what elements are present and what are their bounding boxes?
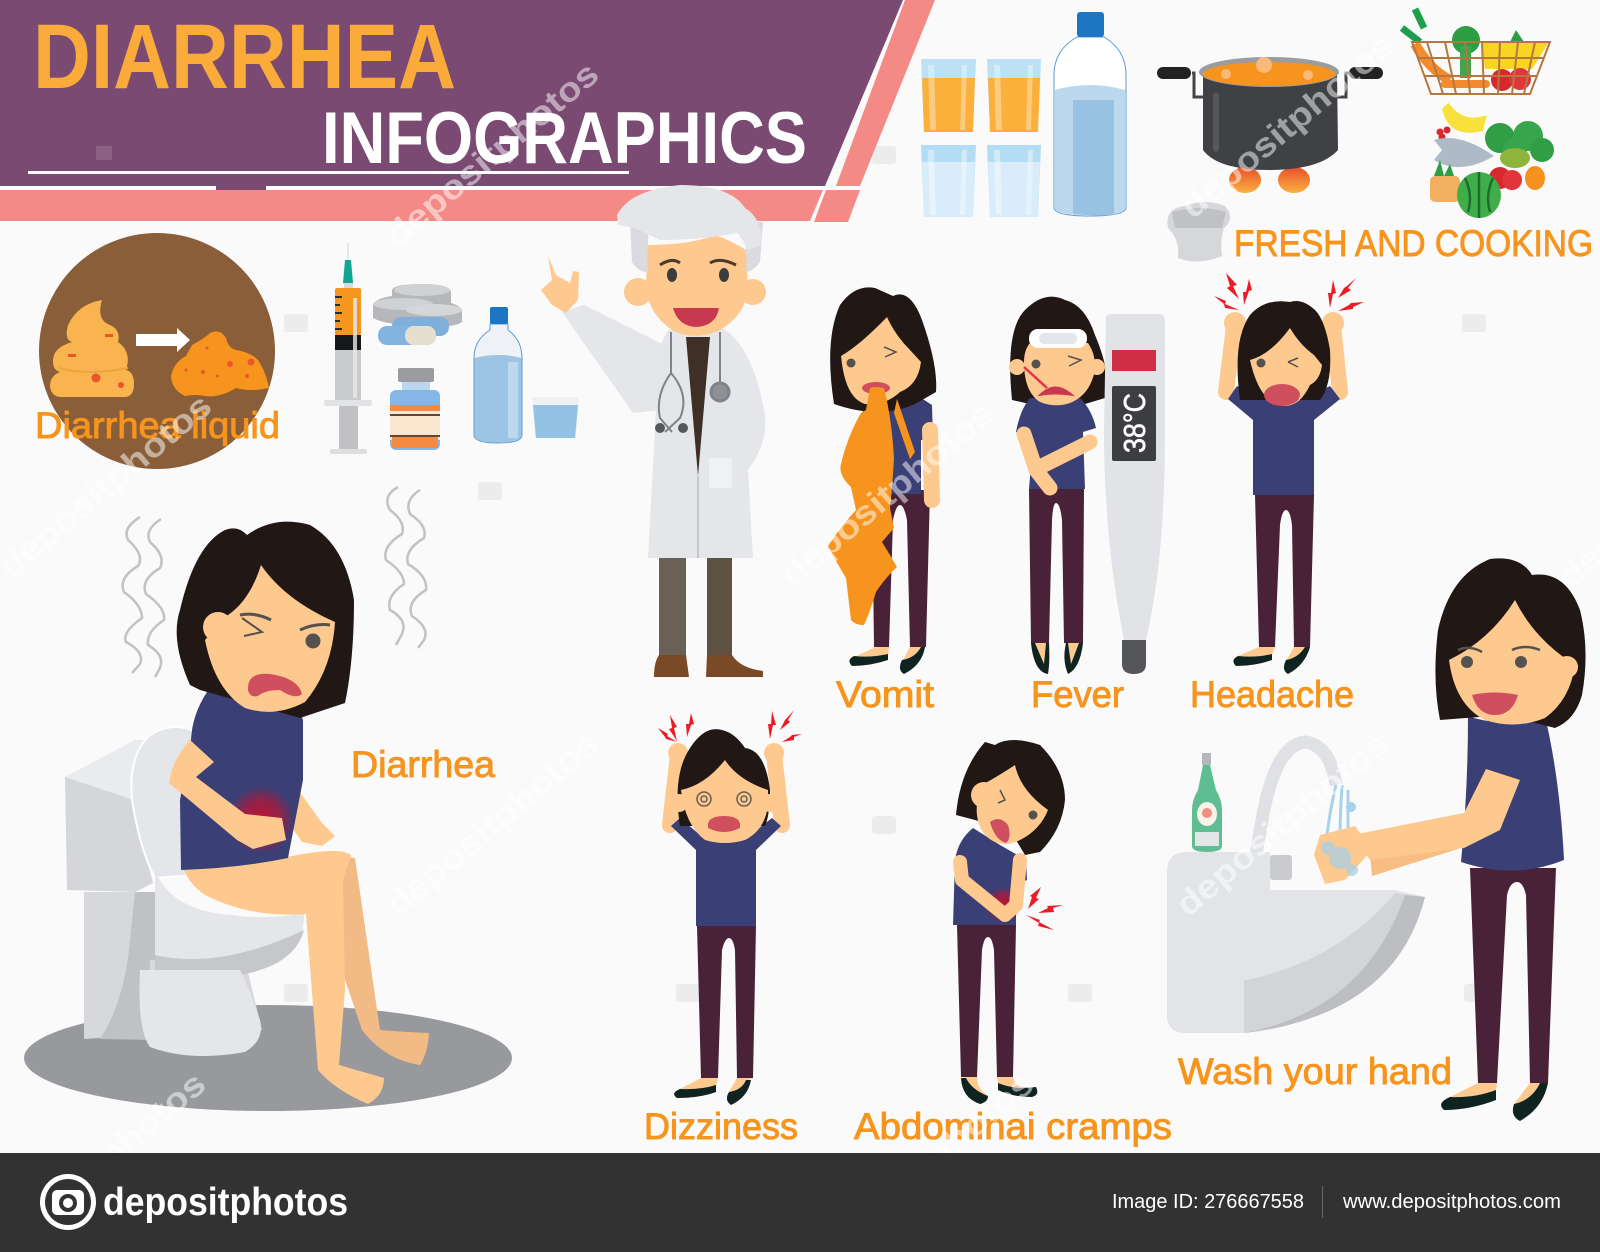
face — [971, 782, 997, 808]
icon: cooking pot — [1157, 57, 1383, 193]
back leg — [325, 856, 429, 1065]
pants — [659, 555, 686, 660]
feet — [1238, 647, 1310, 661]
arms — [670, 755, 782, 825]
legs — [697, 926, 756, 1078]
shirt — [1016, 398, 1096, 489]
header banner — [0, 0, 935, 222]
shoes — [849, 654, 888, 666]
arm — [1024, 434, 1090, 488]
shoes — [654, 655, 689, 677]
shirt — [953, 828, 1027, 925]
label: dizziness: Dizziness — [644, 1106, 798, 1147]
far hand — [290, 784, 335, 846]
hands — [1314, 826, 1372, 884]
lightning — [1214, 273, 1364, 311]
hair — [956, 740, 1065, 855]
icon: fresh food — [1430, 108, 1554, 218]
icon: vial — [390, 368, 440, 450]
label: fever: Fever — [1031, 674, 1124, 715]
shirt — [862, 389, 933, 494]
label: diarrhea: Diarrhea — [351, 744, 495, 785]
water — [1327, 785, 1348, 840]
basin — [1167, 852, 1425, 1033]
hair — [830, 287, 936, 412]
soap bottle — [1192, 753, 1222, 852]
logo text: depositphotos — [103, 1181, 348, 1224]
icon: water bottle small — [474, 307, 522, 443]
coat and arm — [648, 328, 765, 558]
thigh and front leg — [184, 851, 384, 1104]
faint background camera marks — [86, 146, 1488, 1002]
feet — [1450, 1083, 1548, 1104]
figure: abdominal cramps — [953, 740, 1065, 1104]
icon: normal stool — [50, 300, 134, 397]
watermarks: depositphotos — [379, 725, 606, 924]
feet — [1035, 643, 1079, 664]
figure: woman washing hands — [1314, 558, 1586, 1121]
sink with faucet — [1167, 742, 1425, 1033]
lightning — [1026, 887, 1063, 930]
face — [1250, 328, 1322, 406]
hair — [177, 522, 354, 718]
figure: vomit — [828, 287, 936, 674]
legs — [1029, 489, 1084, 643]
feet — [854, 647, 925, 662]
faucet — [1250, 742, 1336, 890]
figure: doctor — [541, 185, 766, 677]
title — [33, 6, 807, 179]
icon: pills — [373, 284, 462, 345]
face — [1556, 656, 1578, 678]
lightning — [658, 710, 802, 742]
label: vomit: Vomit — [836, 674, 935, 715]
icon: glass small — [532, 397, 579, 438]
label: Diarrhea liquid — [35, 405, 280, 446]
stethoscope — [659, 332, 729, 432]
hair — [1238, 301, 1330, 400]
shoes — [1441, 1090, 1496, 1110]
hair — [1010, 297, 1107, 404]
thermometer — [1104, 314, 1165, 674]
shoes — [1233, 654, 1272, 666]
icon: juice glasses — [921, 59, 1041, 132]
shirt — [1228, 386, 1340, 495]
arm — [1370, 838, 1461, 876]
figure: diarrhea on toilet — [24, 487, 512, 1111]
hand — [541, 256, 579, 313]
shirt — [180, 692, 303, 870]
watermarks: depositphotos — [774, 395, 1001, 594]
face — [841, 317, 921, 404]
hair — [678, 729, 770, 826]
title: INFOGRAPHICS — [322, 98, 807, 179]
feet — [680, 1078, 753, 1092]
icon: big bottle — [1054, 12, 1126, 216]
arm — [169, 740, 286, 849]
shoes — [1031, 643, 1049, 674]
watermarks: depositphotos — [1174, 27, 1401, 226]
icon: water glasses — [921, 145, 1041, 217]
footer bar — [0, 1153, 1600, 1252]
figure: headache — [1214, 273, 1364, 674]
watermarks: depositphotos — [1169, 725, 1396, 924]
icon: chef hat — [1167, 202, 1230, 262]
icon: camera logo — [40, 1174, 96, 1230]
arm — [960, 860, 1020, 915]
face — [1009, 359, 1025, 375]
arms — [1226, 326, 1340, 392]
forehead band — [1029, 329, 1087, 348]
flames — [1229, 167, 1261, 193]
legs — [957, 925, 1016, 1077]
label: wash your hand: Wash your hand — [1178, 1051, 1452, 1092]
figure: dizziness — [658, 710, 802, 1105]
legs — [1255, 495, 1314, 647]
drinks — [921, 12, 1126, 217]
title: DIARRHEA — [33, 6, 456, 108]
image id: Image ID: 276667558 — [1112, 1191, 1304, 1213]
icon: syringe — [324, 243, 372, 454]
shoes — [961, 1078, 988, 1104]
smell lines — [123, 487, 426, 677]
feet — [961, 1077, 1036, 1096]
hair — [1435, 558, 1586, 728]
head — [624, 278, 652, 306]
watermarks: depositphotos — [379, 55, 606, 254]
floor shadow — [24, 1005, 512, 1111]
shoes — [674, 1085, 716, 1098]
label: headache: Headache — [1190, 674, 1354, 715]
icon: basket of vegetables — [1402, 9, 1550, 94]
arm — [930, 430, 932, 500]
shirt — [1461, 716, 1564, 871]
shirt — [671, 818, 781, 926]
arrow — [136, 328, 190, 352]
belly pain glow — [227, 786, 295, 854]
face — [203, 612, 233, 642]
legs — [1470, 868, 1556, 1083]
pain glow — [985, 887, 1021, 923]
label: abdominal cramps: Abdominai cramps — [854, 1106, 1172, 1147]
website: www.depositphotos.com — [1342, 1191, 1561, 1213]
thermometer: 38°C — [1117, 393, 1152, 453]
face — [670, 794, 688, 812]
toilet — [65, 727, 304, 1056]
vomit — [828, 387, 915, 625]
legs — [872, 490, 930, 647]
panel: stool circle — [35, 233, 280, 469]
icon: liquid stool — [171, 331, 269, 396]
figure: fever — [1009, 297, 1107, 674]
